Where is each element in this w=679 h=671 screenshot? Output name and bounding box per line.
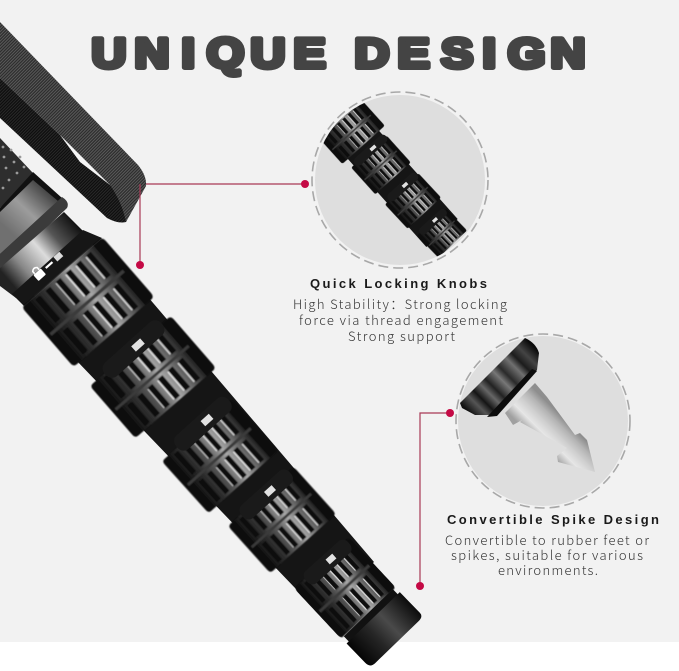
description: convertible spike: Convertible to rubber feet or: [445, 530, 649, 549]
metal collar: [0, 212, 86, 298]
callout lines: knobs: [136, 180, 309, 269]
title: UNIQUE DESIGN: [92, 29, 585, 77]
detail circle: convertible spike: [456, 334, 630, 508]
rubber rings between knobs: [51, 270, 374, 614]
callout lines: spike: [416, 409, 454, 590]
knob 5: [294, 537, 396, 639]
heading: quick locking knobs: Quick Locking Knobs: [310, 276, 487, 291]
knob 1: [22, 237, 154, 367]
heading: convertible spike design: Convertible Spike Design: [447, 512, 659, 527]
knob 4: [228, 467, 336, 573]
ring highlights: [99, 317, 354, 587]
product photo: monopod: [0, 22, 423, 668]
metal handle section: [0, 172, 68, 270]
description: quick locking knobs: Strong support: [348, 326, 455, 345]
knob 2: [90, 316, 216, 438]
metal spike: [505, 383, 595, 472]
rubber foot: [342, 587, 423, 668]
wrist strap: [0, 22, 146, 222]
description: convertible spike: [445, 530, 649, 579]
knob 3: [162, 399, 278, 513]
lock icon: [30, 248, 65, 281]
description: quick locking knobs: force via thread engagement: [299, 310, 503, 329]
description: convertible spike: spikes, suitable for various: [451, 545, 643, 564]
description: quick locking knobs: High Stability：Strong locking: [293, 294, 507, 313]
description: quick locking knobs: [293, 294, 507, 345]
knob end: [460, 338, 539, 417]
detail circle: quick locking knobs: [312, 92, 488, 268]
description: convertible spike: environments.: [498, 560, 598, 579]
rubber grip with dots: [0, 138, 35, 208]
dark collar ring: [12, 230, 102, 306]
